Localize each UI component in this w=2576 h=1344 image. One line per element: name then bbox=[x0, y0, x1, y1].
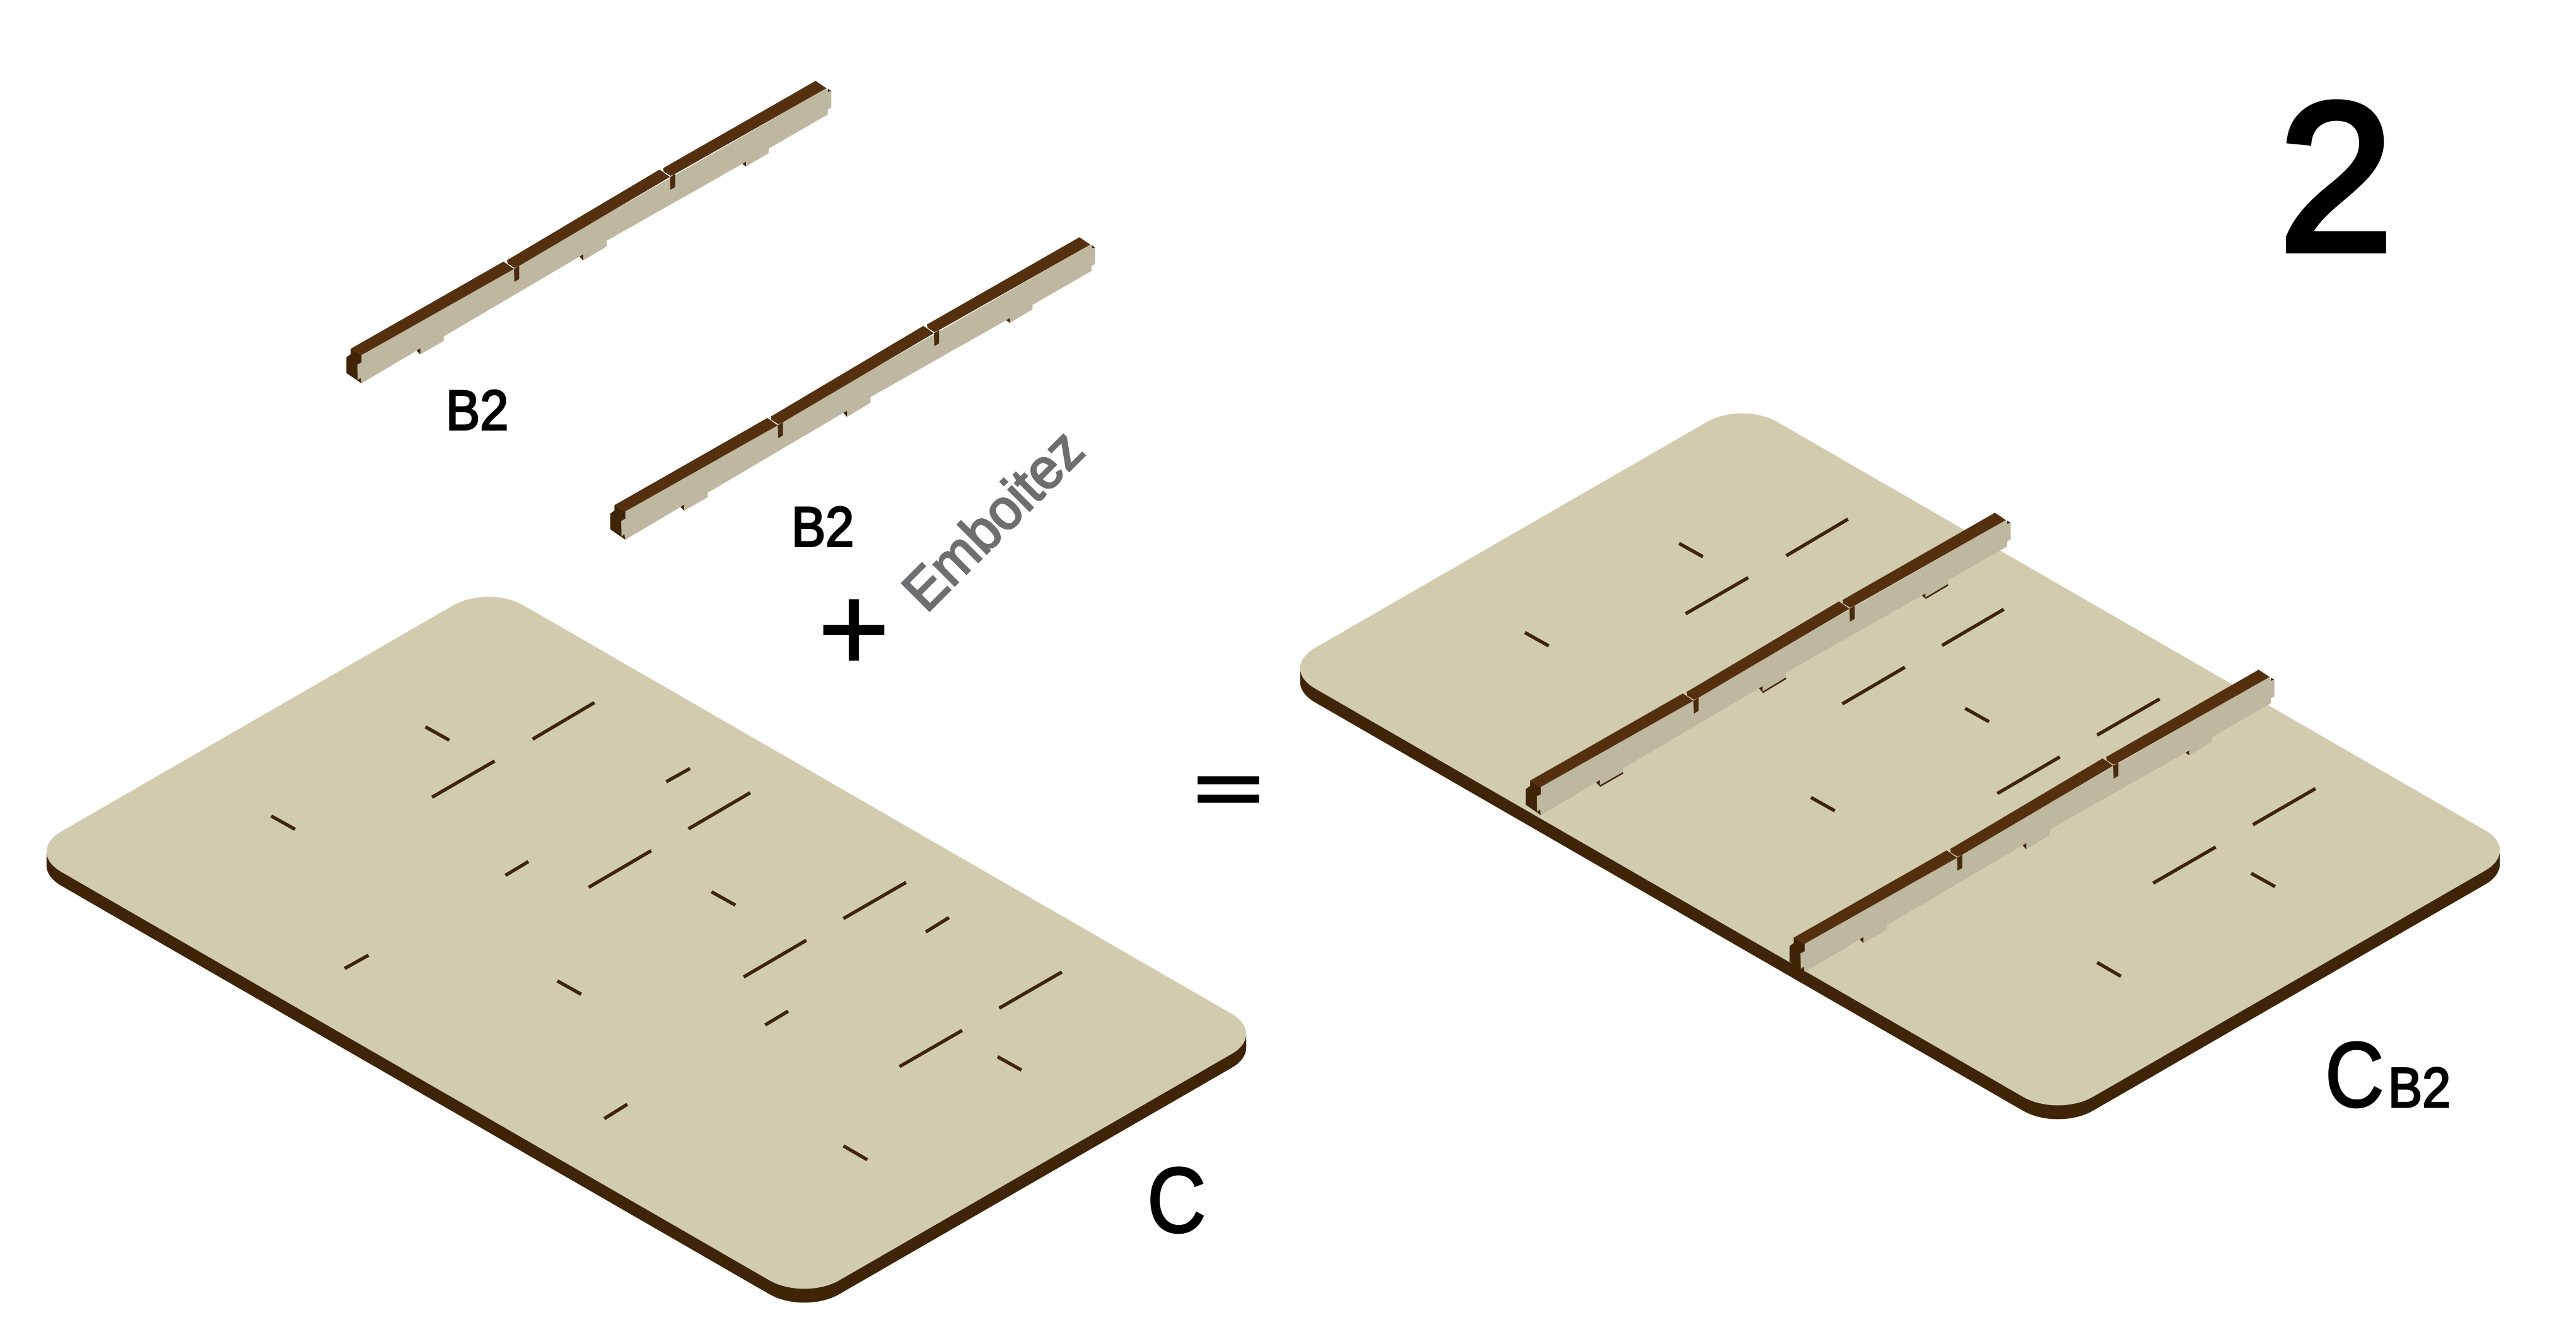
label: B2 first: B2 bbox=[446, 378, 508, 441]
panel: plate C bbox=[26, 585, 1266, 1314]
batten in assembly, front bbox=[1790, 669, 2275, 972]
slots in assembled plate bbox=[1525, 519, 2316, 976]
slots in plate C bbox=[271, 702, 1062, 1160]
part B2, first batten bbox=[346, 81, 831, 383]
part B2, second batten bbox=[610, 237, 1095, 540]
panel: assembled plate with battens bbox=[1280, 402, 2520, 1131]
plus sign: + bbox=[818, 560, 890, 697]
label: B2 second: B2 bbox=[791, 495, 854, 559]
label: C with subscript B2: C bbox=[2325, 1024, 2384, 1127]
label: C with subscript B2: B2 bbox=[2388, 1056, 2451, 1119]
equals sign: = bbox=[1194, 747, 1262, 830]
label: C: C bbox=[1147, 1149, 1206, 1252]
label: C with subscript B2 bbox=[2325, 1024, 2451, 1127]
instruction: Emboitez: Emboitez bbox=[890, 418, 1096, 623]
batten in assembly, rear bbox=[1526, 513, 2011, 815]
step number: 2 bbox=[2279, 59, 2394, 296]
